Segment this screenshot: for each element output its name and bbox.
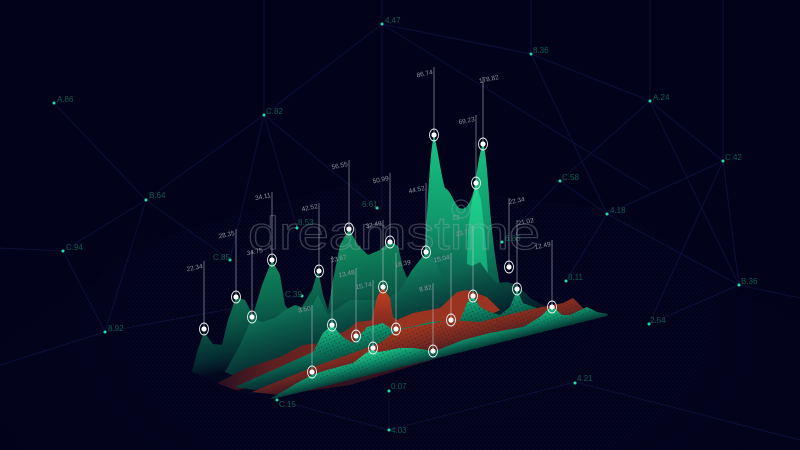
marker 42.52: [301, 203, 324, 277]
marker 50.99: 50.99: [372, 175, 390, 185]
node 6.61: 6.61: [362, 200, 378, 209]
node 0.07: 0.07: [391, 382, 407, 391]
marker 8.50: 8.50: [298, 305, 312, 315]
marker 50.99: [372, 173, 394, 248]
node 8.36: 8.36: [533, 46, 549, 55]
node 8.11: 8.11: [568, 273, 584, 282]
marker 16.39: [392, 253, 412, 335]
node A.24: A.24: [653, 93, 670, 102]
marker 8.82: [419, 283, 438, 357]
node C.94: C.94: [66, 243, 83, 252]
layer: rear red band: [217, 290, 500, 390]
layer: front narrow tower: [466, 183, 490, 300]
watermark icon: [452, 200, 470, 218]
marker 44.52: [408, 183, 430, 258]
marker 56.55: [331, 160, 354, 235]
node C.39: C.39: [285, 290, 302, 299]
marker 16.39: 16.39: [394, 259, 412, 269]
marker 21.02: 21.02: [517, 217, 535, 227]
node B.64: [144, 191, 166, 202]
marker 34.11: 34.11: [255, 192, 272, 202]
marker 86.74: 86.74: [416, 69, 434, 79]
watermark: dreamstime: dreamstime: [248, 207, 540, 259]
data markers: [186, 67, 556, 378]
speckle: front green: [297, 306, 597, 383]
layer: front green hills: [270, 306, 608, 399]
marker 34.11: [255, 192, 276, 266]
speckle: front red: [380, 298, 582, 355]
area chart: [192, 135, 608, 399]
marker 23.77: [455, 226, 478, 302]
layer: mid green ridge: [225, 252, 545, 390]
marker 23.67: 23.67: [330, 254, 348, 264]
node B.64: B.64: [149, 191, 166, 200]
marker 86.74: [416, 67, 438, 141]
marker 69.23: [458, 115, 480, 189]
dotted floor texture: [0, 180, 800, 450]
node 8.53: 8.53: [298, 218, 314, 227]
node C.15: [276, 398, 296, 409]
node 2.54: 2.54: [650, 316, 666, 325]
node A.86: A.86: [57, 95, 74, 104]
node C.58: C.58: [562, 173, 579, 182]
marker 32.49: 32.49: [365, 220, 383, 230]
node C.15: C.15: [279, 400, 296, 409]
marker 44.52: 44.52: [408, 185, 426, 195]
marker 69.23: 69.23: [458, 116, 476, 126]
marker 22.34 right: [504, 196, 526, 273]
marker 28.35: [218, 229, 240, 303]
marker 32.49: [365, 220, 388, 293]
marker 34.75: [246, 247, 264, 323]
marker 15.74: 15.74: [355, 281, 373, 291]
layer: rear left ridge: [192, 229, 420, 395]
node 4.47: 4.47: [385, 16, 401, 25]
layer: tall rear towers: [415, 135, 505, 320]
node 4.21: [574, 374, 593, 384]
marker 178.82: [478, 74, 500, 150]
layer: mid green hills: [235, 290, 537, 392]
marker 34.75: 34.75: [246, 247, 264, 257]
layer: front red band: [252, 298, 590, 395]
marker 13.48: [338, 268, 360, 342]
marker 56.55: 56.55: [331, 161, 349, 171]
marker 28.35: 28.35: [218, 230, 236, 240]
marker 15.74: [355, 280, 378, 354]
marker 22.34: [186, 261, 208, 335]
node 4.03: 4.03: [391, 426, 407, 435]
marker 42.52: 42.52: [301, 203, 319, 213]
marker 8.50: [298, 305, 316, 378]
marker 21.02: [512, 217, 535, 295]
marker 178.82: 178.82: [479, 74, 500, 85]
marker 13.48: 13.48: [338, 269, 356, 279]
marker 8.82: 8.82: [419, 284, 433, 294]
node C.82: C.82: [266, 107, 283, 116]
marker 12.49: 12.49: [534, 241, 552, 251]
layer: red peak: [370, 287, 398, 326]
node 0.07: [388, 382, 407, 392]
marker 15.04: [433, 253, 456, 326]
marker 22.34 right: 22.34: [508, 196, 526, 206]
node 8.92: 8.92: [108, 324, 124, 333]
marker 22.34: 22.34: [186, 263, 204, 273]
node 4.18: 4.18: [610, 206, 626, 215]
marker 23.67: [328, 254, 348, 331]
node C.85: C.85: [213, 253, 230, 262]
marker 12.49: [534, 240, 556, 313]
speckle: mid hills: [313, 290, 537, 365]
marker 15.04: 15.04: [433, 254, 451, 264]
node B.36: B.36: [741, 277, 758, 286]
node 6.86: 6.86: [505, 234, 521, 243]
node 4.21: 4.21: [577, 374, 593, 383]
node 8.53: [296, 218, 314, 230]
node C.42: C.42: [725, 153, 742, 162]
marker 23.77: 23.77: [455, 228, 473, 238]
